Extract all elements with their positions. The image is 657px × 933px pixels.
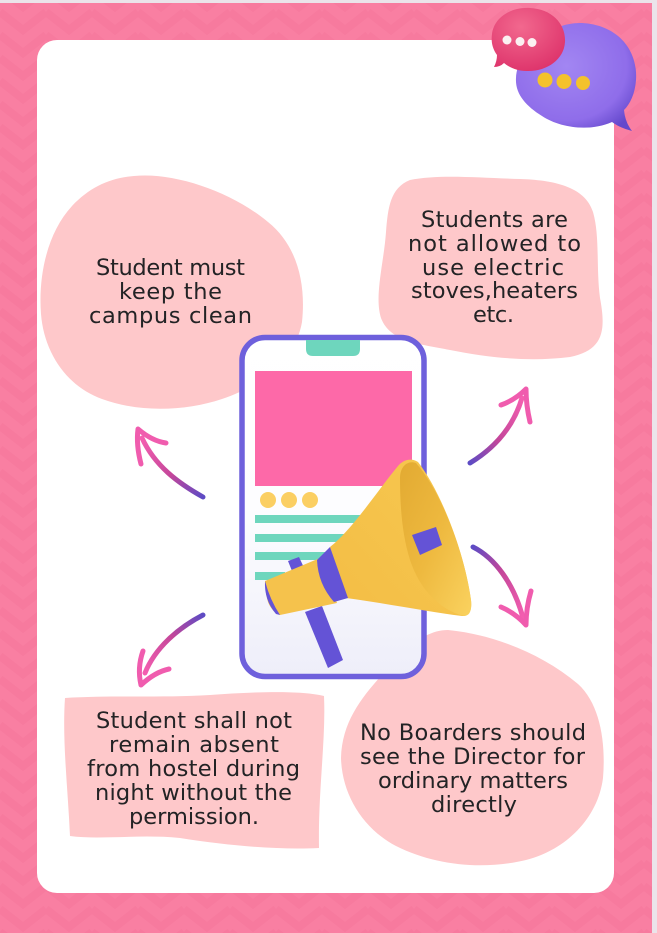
text: director: No Boarders should [360,720,586,746]
text: electric stoves not allowed: not allowed to [408,231,581,257]
blob: top left [40,175,303,409]
arrow: bottom right [473,547,531,625]
megaphone band [317,547,348,602]
text: electric stoves not allowed: stoves,heaters [411,278,578,304]
text: absent from hostel: remain absent [109,732,279,758]
text: director: ordinary matters [378,768,568,794]
text: keep the campus clean [89,255,252,329]
text: absent from hostel: Student shall not [96,708,292,734]
phone dots [260,492,318,508]
text: keep the campus clean: campus clean [89,303,252,329]
text: absent from hostel [87,708,300,830]
text: director: see the Director for [360,744,586,770]
megaphone speaker [412,527,442,555]
text: absent from hostel: from hostel during [87,756,300,782]
phone notch [306,340,360,356]
text: director [360,720,586,818]
megaphone handle [305,606,343,668]
text: keep the campus clean: keep the [119,279,222,305]
text: absent from hostel: night without the [95,780,292,806]
megaphone cone [330,460,471,616]
arrow: top right [470,389,530,463]
icon: purple speech bubble [516,23,636,131]
text: director: directly [431,792,517,818]
icon: red speech bubble [492,8,565,71]
text: absent from hostel: permission. [129,804,259,830]
text: electric stoves not allowed [408,207,581,328]
blob: bottom right [341,630,604,865]
megaphone mouth [400,462,471,616]
text: electric stoves not allowed: Students are [421,207,568,233]
phone pink banner [255,371,412,486]
icon: phone [242,338,424,676]
phone text lines [255,515,370,580]
blob: top right [379,177,603,359]
text: electric stoves not allowed: etc. [473,302,514,328]
text: electric stoves not allowed: use electric [422,255,564,281]
blob: bottom left [64,692,324,849]
arrow: bottom left [139,615,203,685]
arrow: top left [137,429,203,497]
text: keep the campus clean: Student must [96,255,245,281]
icon: megaphone [265,460,471,668]
megaphone tail [265,558,337,615]
